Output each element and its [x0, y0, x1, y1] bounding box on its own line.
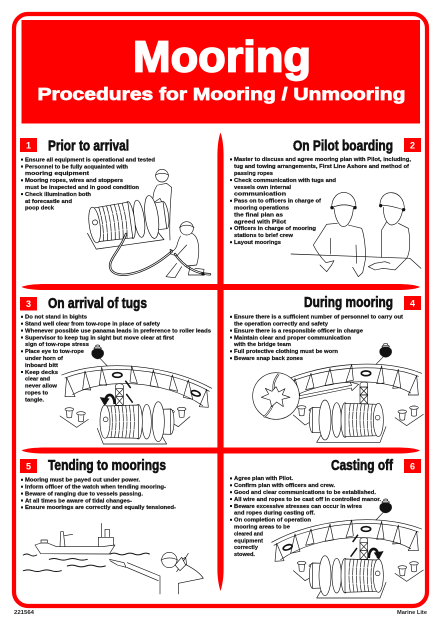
badge 3: 3: [26, 299, 31, 309]
text block 4: Ensure there is a responsible officer in charge: [234, 328, 363, 334]
panel 5: tending to moorings: [20, 458, 203, 594]
text block 2: Check communication with tugs and: [234, 178, 336, 184]
text block 3: Do not stand in bights: [25, 315, 87, 321]
horizontal divider upper: [22, 284, 420, 290]
mooring rope: [110, 234, 210, 275]
text block 2: the final plan as: [234, 212, 283, 218]
text block 6: Confirm plan with officers and crew.: [234, 483, 336, 489]
badge 6: 6: [410, 461, 415, 471]
panel 1: prior to arrival: [20, 138, 210, 278]
text block 2: [230, 157, 412, 246]
panel 4: during mooring: [230, 295, 423, 442]
text block 5: Mooring must be payed out under power.: [25, 478, 141, 484]
illustration: crew at winch: [83, 169, 210, 278]
text block 3: Stand well clear from tow-rope in place of safety: [25, 322, 160, 328]
text block 2: tug and towing arrangements, First Line Ashore and method of: [234, 164, 409, 170]
text block 6: All wire and ropes to be cast off in controlled manor.: [234, 497, 382, 503]
badge 1: [20, 138, 37, 152]
text block 2: Officers in charge of mooring: [234, 226, 316, 232]
text block 1: must be inspected and in good condition: [25, 185, 139, 191]
text block 5: At all times be aware of tidal changes-: [25, 498, 132, 504]
heading 4: During mooring: [304, 295, 393, 311]
text block 6: equipment: [234, 538, 263, 544]
text block 1: at forecastle and: [25, 199, 72, 205]
detail circle: parting rope: [253, 373, 299, 419]
text block 1: mooring equipment: [25, 171, 89, 177]
illustration: foredeck casting off: [272, 499, 423, 598]
heading 2: On Pilot boarding: [293, 139, 393, 155]
badge 2: [404, 138, 421, 152]
badge 2: 2: [410, 140, 415, 150]
standing crewman: [152, 169, 172, 240]
crouching crewman: [166, 222, 204, 278]
text block 3: Whenever possible use panama leads in preference to roller leads: [25, 328, 211, 334]
pilot figure: [368, 193, 410, 270]
text block 3: tangle.: [25, 397, 45, 403]
panel 6: casting off: [230, 458, 423, 598]
text block 2: vessels own internal: [234, 185, 292, 191]
text block 2: Pass on to officers in charge of: [234, 199, 321, 205]
text block 3: never allow: [25, 384, 58, 390]
text block 3: inboard bitt: [25, 363, 58, 369]
horizontal divider lower: [22, 448, 420, 454]
text block 6: [230, 476, 382, 558]
text block 5: [21, 478, 176, 511]
title banner: [22, 20, 420, 124]
badge 4: [404, 296, 421, 310]
text block 3: Keep decks: [25, 370, 58, 376]
text block 6: cleared and: [234, 531, 263, 537]
panel 3: on arrival of tugs: [20, 296, 212, 444]
text block 2: passing ropes: [234, 171, 273, 177]
text block 3: [21, 315, 211, 403]
panel 2: on pilot boarding: [230, 138, 421, 277]
text block 6: Good and clear communications to be established.: [234, 490, 377, 496]
badge 1: 1: [26, 140, 31, 150]
text block 5: Ensure moorings are correctly and equally tensioned-: [25, 505, 176, 511]
heading 1: Prior to arrival: [48, 139, 129, 155]
text block 2: agreed with Pilot: [234, 219, 286, 225]
badge 6: [404, 459, 421, 473]
text block 6: On completion of operation: [234, 518, 311, 524]
text block 3: sign of tow-rope stress: [25, 342, 89, 348]
text block 1: [21, 157, 155, 212]
text block 1: Ensure all equipment is operational and tested: [25, 157, 155, 163]
text block 2: Master to discuss and agree mooring plan with Pilot, including,: [234, 157, 412, 163]
text block 1: Mooring ropes, wires and stoppers: [25, 178, 123, 184]
text block 4: Maintain clear and proper communication: [234, 335, 351, 341]
badge 4: 4: [410, 298, 415, 308]
heading 3: On arrival of tugs: [48, 296, 147, 312]
text block 6: stowed.: [234, 552, 256, 558]
publisher name: Marine Lite: [397, 610, 427, 616]
vessel: [35, 523, 115, 554]
vertical divider: [217, 132, 224, 591]
text block 3: Place eye to tow-rope: [25, 349, 84, 355]
text block 2: Layout moorings: [234, 240, 281, 246]
text block 1: poop deck: [25, 206, 54, 212]
text block 5: Beware of ranging due to vessels passing.: [25, 491, 144, 497]
text block 4: the operation correctly and safety: [234, 322, 328, 328]
signalling crewman: [109, 552, 203, 594]
text block 2: communication: [234, 192, 286, 198]
illustration: vessel and signalling crewman: [23, 523, 203, 594]
text block 6: and ropes during casting off.: [234, 511, 316, 517]
illustration: snap-back zone on deck: [253, 343, 423, 442]
waves: [23, 553, 149, 571]
subtitle: Procedures for Mooring / Unmooring: [38, 84, 406, 104]
text block 3: Supervisor to keep tug in sight but move clear at first: [25, 335, 174, 341]
master figure: [313, 192, 366, 277]
chart table: [291, 254, 421, 268]
text block 2: stations to brief crew: [234, 233, 294, 239]
heading 5: Tending to moorings: [48, 458, 166, 474]
reference number: 221564: [14, 610, 34, 616]
text block 6: correctly: [234, 545, 258, 551]
text block 6: Agree plan with Pilot.: [234, 476, 294, 482]
text block 3: ropes to: [25, 390, 49, 396]
title: Mooring: [133, 32, 311, 82]
illustration: foredeck with winch and tug line: [60, 345, 212, 444]
badge 5: 5: [26, 461, 31, 471]
text block 3: under horn of: [25, 356, 63, 362]
text block 6: Beware excessive stresses can occur in wires: [234, 504, 362, 510]
text block 4: with the bridge team: [233, 342, 291, 348]
text block 1: Check illumination both: [25, 192, 91, 198]
text block 5: Inform officer of the watch when tending mooring-: [25, 484, 166, 490]
text block 4: Beware snap back zones: [234, 356, 303, 362]
text block 4: [230, 315, 403, 362]
text block 6: mooring areas to be: [234, 524, 290, 530]
badge 5: [20, 459, 37, 473]
badge 3: [20, 297, 37, 310]
text block 4: Full protective clothing must be worn: [234, 349, 338, 355]
text block 1: Personnel to be fully acquainted with: [25, 164, 128, 170]
text block 4: Ensure there is a sufficient number of personnel to carry out: [234, 315, 403, 321]
illustration: master and pilot at table: [291, 192, 421, 277]
text block 3: clear and: [25, 377, 50, 383]
text block 2: mooring operations: [234, 206, 289, 212]
heading 6: Casting off: [331, 458, 393, 474]
arrow from detail to stand: [298, 382, 359, 399]
